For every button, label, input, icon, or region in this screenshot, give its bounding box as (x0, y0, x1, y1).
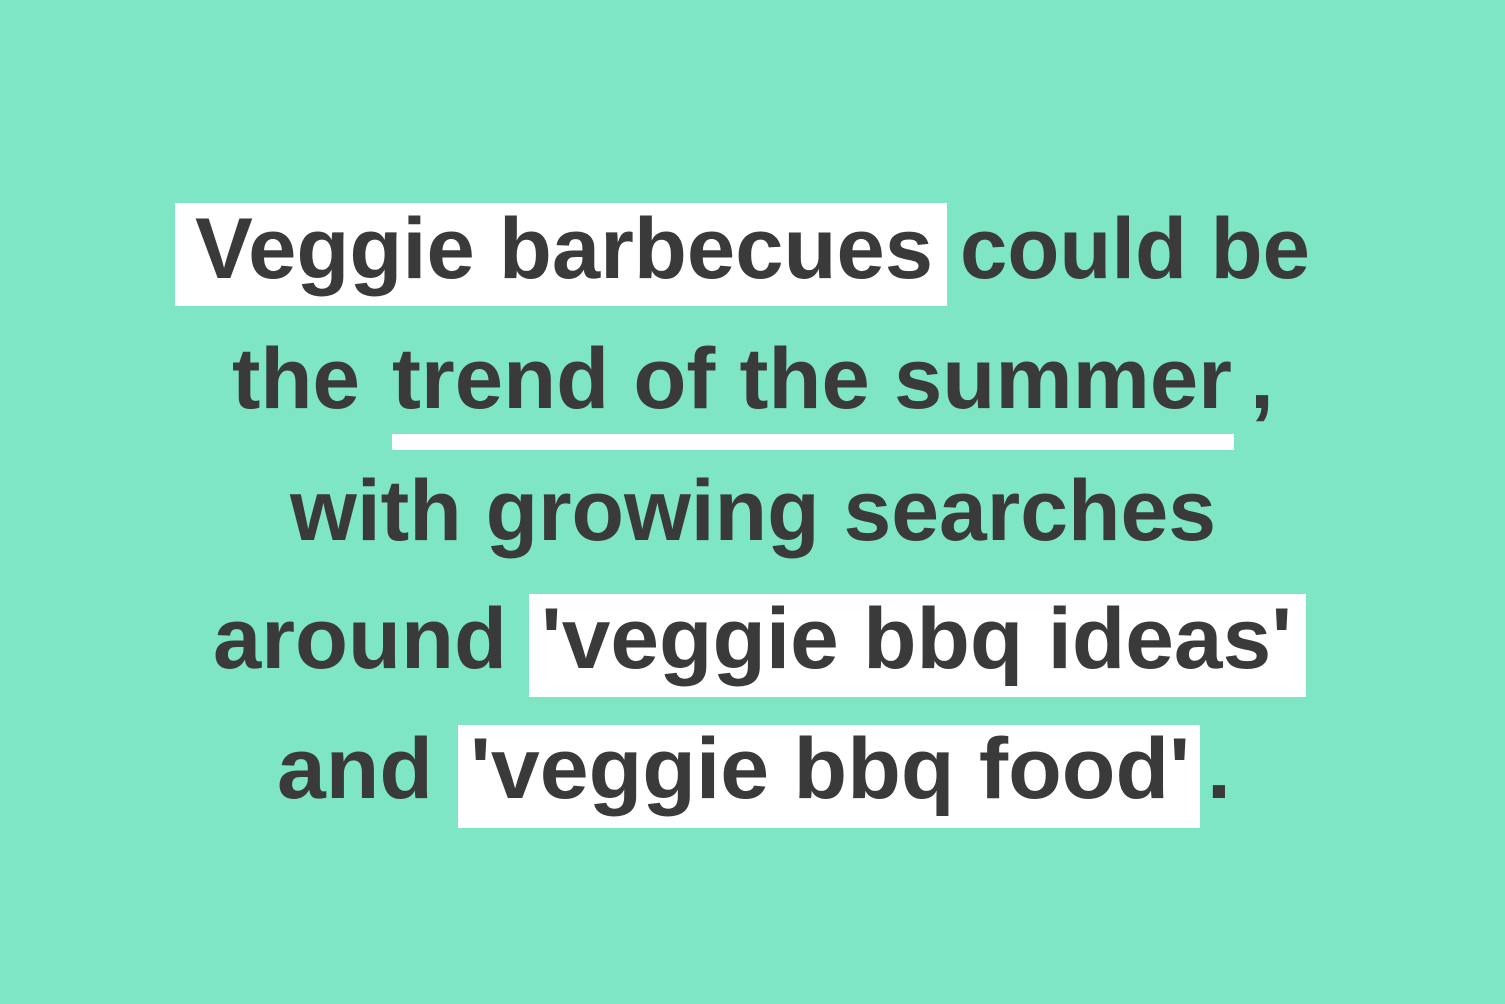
highlight: veggie bbq food (458, 725, 1200, 828)
headline text: could be (960, 201, 1310, 297)
headline text: . (1207, 721, 1231, 817)
headline text: and (277, 721, 433, 817)
headline text (195, 201, 1310, 817)
headline text: trend of the summer (392, 331, 1232, 427)
headline text: the (232, 331, 360, 427)
headline text: with growing searches (289, 463, 1216, 559)
headline text: , (1250, 331, 1274, 427)
highlight: veggie barbecues (175, 203, 947, 306)
headline text: around (213, 591, 507, 687)
highlight: veggie bbq ideas (529, 594, 1306, 697)
headline text: Veggie barbecues (195, 201, 933, 297)
headline text: 'veggie bbq food' (470, 721, 1190, 817)
underline: trend of the summer (392, 434, 1234, 450)
headline text: 'veggie bbq ideas' (541, 591, 1292, 687)
